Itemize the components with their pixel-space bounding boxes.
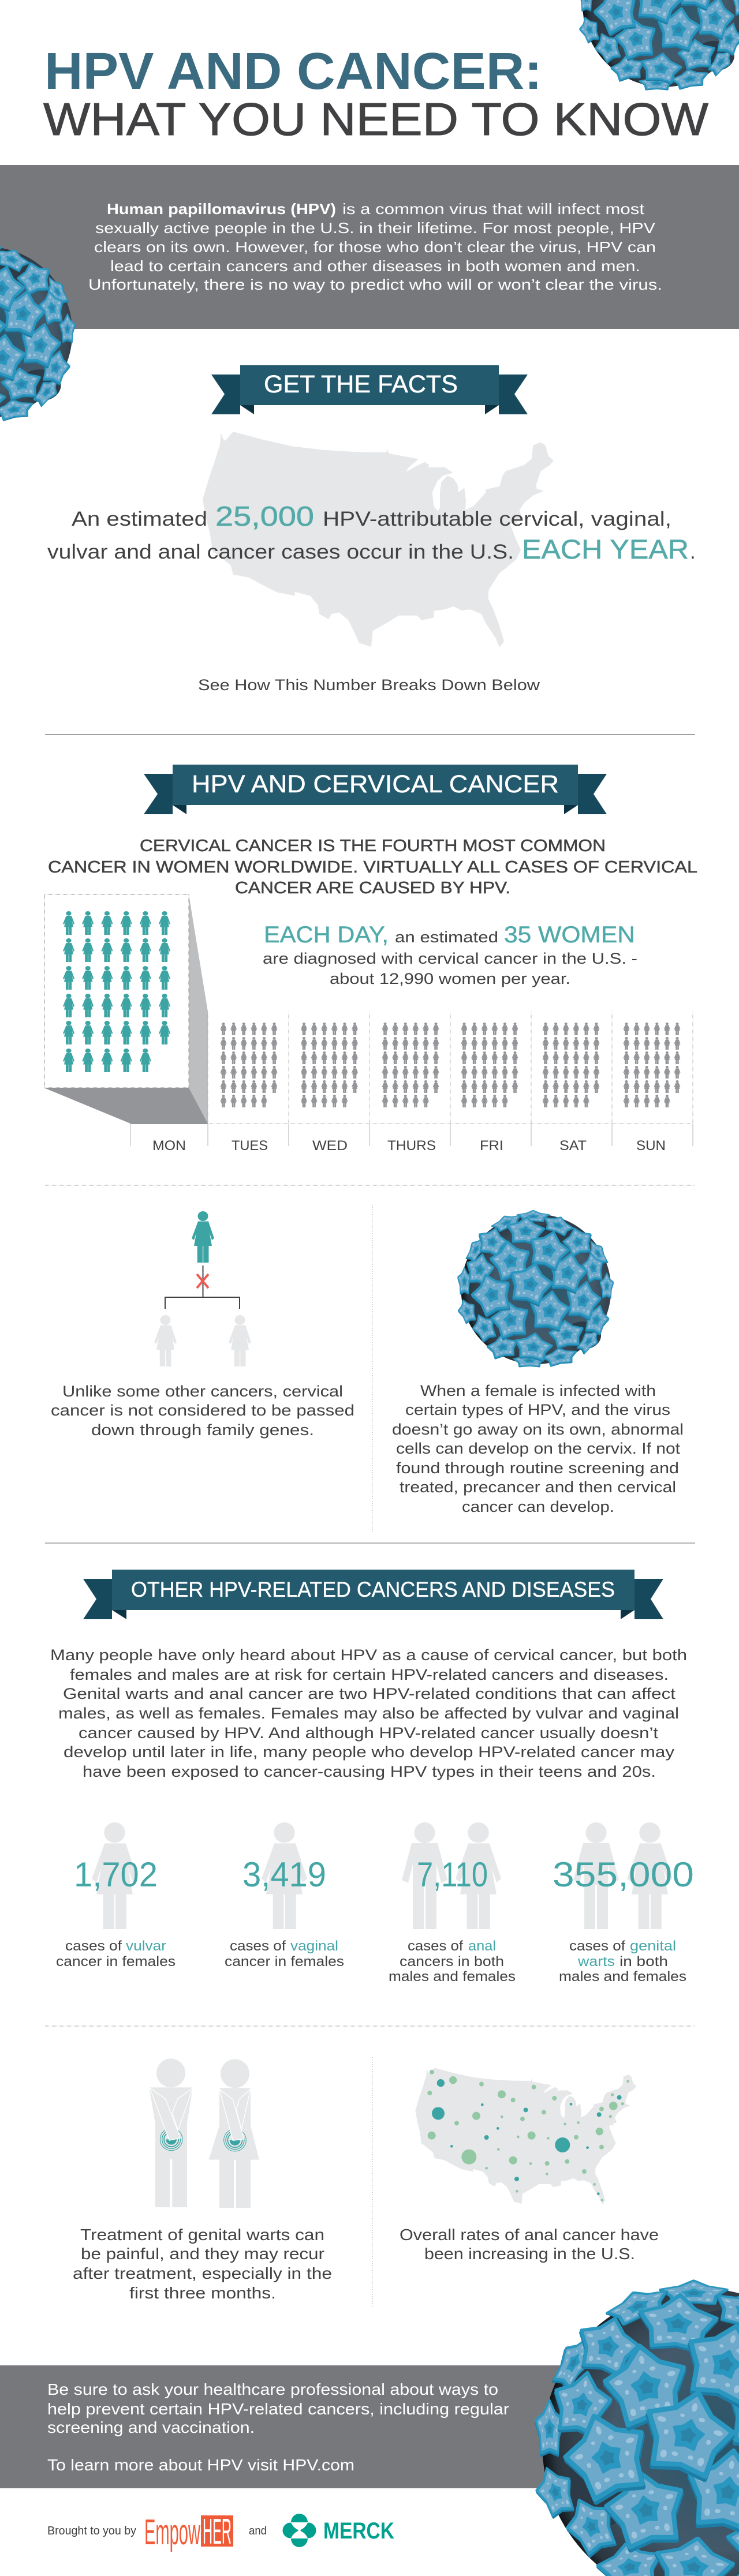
icon: virus center	[456, 1211, 613, 1367]
stat: vulvar: cases of	[65, 1938, 122, 1954]
intro text: is a common virus that will infect most	[342, 200, 645, 218]
day labels: FRI	[480, 1138, 503, 1154]
text: HER	[203, 2512, 232, 2552]
stat: anal: cancers in both	[400, 1954, 504, 1970]
stat: vaginal: 3,419	[242, 1855, 326, 1894]
text: genital warts treatment: after treatment, especially in the	[73, 2264, 332, 2282]
stat: anal	[389, 1822, 516, 1985]
stat: genital warts: males and females	[559, 1969, 686, 1985]
text: estimate: EACH YEAR	[522, 534, 689, 564]
stat: anal: cases of	[408, 1938, 463, 1954]
text: cervical cancer statement	[48, 837, 697, 897]
intro text: sexually active people in the U.S. in their lifetime. For most people, HPV	[95, 219, 656, 237]
text: estimate: An estimated	[72, 508, 207, 530]
stat: genital warts: warts	[577, 1954, 615, 1970]
intro text: lead to certain cancers and other diseases in both women and men.	[110, 257, 640, 275]
intro text: Human papillomavirus (HPV)	[107, 200, 336, 218]
banner: other HPV-related cancers: OTHER HPV-RELATED CANCERS AND DISEASES	[131, 1578, 615, 1601]
icon: genital warts figures	[149, 2058, 259, 2208]
text: when a female is infected	[392, 1382, 684, 1515]
stat: genital warts	[553, 1822, 694, 1985]
text: each day 35 women: about 12,990 women per year.	[330, 970, 570, 987]
day labels: SAT	[559, 1138, 587, 1154]
day labels: MON	[152, 1138, 186, 1154]
stat: genital warts: genital	[630, 1938, 676, 1954]
text: call to action: Be sure to ask your healthcare professional about ways to	[47, 2380, 498, 2398]
text: each day 35 women: 35 WOMEN	[504, 922, 635, 948]
logo: EmpowHER: Empow	[144, 2513, 200, 2552]
text: genital warts treatment: be painful, and they may recur	[81, 2245, 324, 2263]
stat: vaginal: cancer in females	[225, 1954, 344, 1970]
text: call to action: screening and vaccination.	[47, 2418, 255, 2436]
panel: intro band	[0, 165, 739, 329]
text: and: and	[249, 2525, 267, 2537]
title	[43, 43, 709, 145]
text: estimate	[47, 501, 696, 564]
text: when a female is infected: certain types of HPV, and the virus	[405, 1401, 670, 1418]
intro text: clears on its own. However, for those who don’t clear the virus, HPV can	[94, 238, 656, 256]
title: WHAT YOU NEED TO KNOW	[43, 93, 709, 145]
stat: genital warts: in both	[619, 1954, 668, 1970]
text: other cancers body: have been exposed to cancer-causing HPV types in their teens and 20s.	[83, 1763, 656, 1780]
text: when a female is infected: When a female is infected with	[420, 1382, 656, 1399]
day labels: TUES	[232, 1138, 268, 1154]
text: overall rates: been increasing in the U.S.	[424, 2245, 635, 2263]
stat: vulvar: cancer in females	[56, 1954, 176, 1970]
day labels: WED	[312, 1138, 348, 1154]
text: call to action: To learn more about HPV visit HPV.com	[47, 2456, 354, 2474]
text: cervical cancer statement: CANCER IN WOMEN WORLDWIDE. VIRTUALLY ALL CASES OF CERVICAL	[48, 858, 697, 877]
text: estimate: HPV-attributable cervical, vaginal,	[323, 508, 671, 530]
icon: family tree	[154, 1211, 251, 1366]
banner: HPV and cervical cancer: HPV AND CERVICAL CANCER	[192, 770, 559, 798]
text: call to action	[47, 2380, 509, 2474]
text: each day 35 women: an estimated	[395, 928, 498, 946]
banner: get the facts: GET THE FACTS	[264, 370, 458, 398]
text: when a female is infected: treated, precancer and then cervical	[400, 1478, 676, 1496]
text: when a female is infected: cells can develop on the cervix. If not	[396, 1440, 681, 1457]
text: genital warts treatment: first three months.	[129, 2284, 276, 2302]
stat: vaginal	[225, 1822, 344, 1970]
text: not passed down	[51, 1383, 354, 1439]
stat: vulvar	[56, 1822, 176, 1970]
map: US silhouette	[203, 432, 554, 647]
text: call to action: help prevent certain HPV-related cancers, including regular	[47, 2400, 509, 2418]
text: genital warts treatment	[73, 2226, 332, 2302]
stat: anal: males and females	[389, 1969, 516, 1985]
text: other cancers body: cancer caused by HPV. And although HPV-related cancer usually doesn’t	[79, 1724, 659, 1742]
icon: virus bottom right	[531, 2281, 739, 2576]
text: other cancers body: Many people have only heard about HPV as a cause of cervical cancer, but both	[50, 1646, 687, 1664]
logo: Merck	[283, 2514, 394, 2547]
day labels: SUN	[636, 1138, 666, 1154]
banner: HPV and cervical cancer	[144, 765, 607, 814]
text: when a female is infected: found through routine screening and	[396, 1459, 679, 1477]
stat: genital warts: cases of	[569, 1938, 625, 1954]
text: genital warts treatment: Treatment of genital warts can	[80, 2226, 324, 2244]
logo: Merck: MERCK	[323, 2518, 394, 2544]
icon: virus top right	[577, 0, 739, 90]
text: see how number breaks down: See How This Number Breaks Down Below	[198, 676, 540, 694]
text: each day 35 women: EACH DAY,	[264, 922, 389, 948]
title: HPV AND CANCER:	[44, 43, 542, 100]
text: other cancers body: develop until later in life, many people who develop HPV-related cancer may	[64, 1743, 675, 1761]
text: not passed down: cancer is not considered to be passed	[51, 1402, 354, 1419]
text: estimate: .	[690, 541, 696, 563]
stat: genital warts: 355,000	[553, 1855, 694, 1894]
text: estimate: vulvar and anal cancer cases occur in the U.S.	[47, 541, 514, 563]
text: overall rates	[400, 2226, 659, 2263]
day labels	[152, 1138, 666, 1154]
text: each day 35 women: are diagnosed with cervical cancer in the U.S. -	[263, 950, 637, 967]
stat: vaginal: vaginal	[290, 1938, 338, 1954]
chart: week of diagnoses	[44, 894, 693, 1154]
text: not passed down: Unlike some other cancers, cervical	[62, 1383, 343, 1400]
text: other cancers body: Genital warts and anal cancer are two HPV-related conditions that can affect	[63, 1685, 676, 1702]
stat: anal: anal	[468, 1938, 496, 1954]
text: each day 35 women	[263, 922, 637, 987]
Monday extruded panel	[44, 894, 208, 1124]
day labels: THURS	[387, 1138, 436, 1154]
icon: virus left	[0, 242, 75, 422]
credit: brought to you by: Brought to you by	[47, 2525, 136, 2537]
text: other cancers body: males, as well as females. Females may also be affected by vulvar and vaginal	[58, 1705, 679, 1722]
banner: get the facts	[211, 365, 528, 414]
text: other cancers body: females and males are at risk for certain HPV-related cancers and diseases.	[70, 1666, 669, 1683]
stat: vulvar: vulvar	[126, 1938, 166, 1954]
text: not passed down: down through family genes.	[91, 1421, 314, 1439]
intro text: Unfortunately, there is no way to predict who will or won’t clear the virus.	[88, 276, 662, 293]
text: other cancers body	[50, 1646, 687, 1780]
stat: anal: 7,110	[417, 1855, 488, 1894]
banner: other HPV-related cancers	[83, 1570, 663, 1619]
text: cervical cancer statement: CANCER ARE CAUSED BY HPV.	[235, 879, 510, 897]
stat: vulvar: 1,702	[74, 1855, 158, 1894]
panel: bottom band	[0, 2365, 739, 2488]
text: cervical cancer statement: CERVICAL CANCER IS THE FOURTH MOST COMMON	[140, 837, 606, 855]
intro text	[88, 200, 662, 293]
stat: vaginal: cases of	[230, 1938, 286, 1954]
text: estimate: 25,000	[215, 501, 314, 532]
text: when a female is infected: doesn’t go away on its own, abnormal	[392, 1421, 684, 1438]
text: overall rates: Overall rates of anal cancer have	[400, 2226, 659, 2244]
text: when a female is infected: cancer can develop.	[462, 1498, 614, 1515]
map: anal cancer rates	[415, 2068, 636, 2204]
